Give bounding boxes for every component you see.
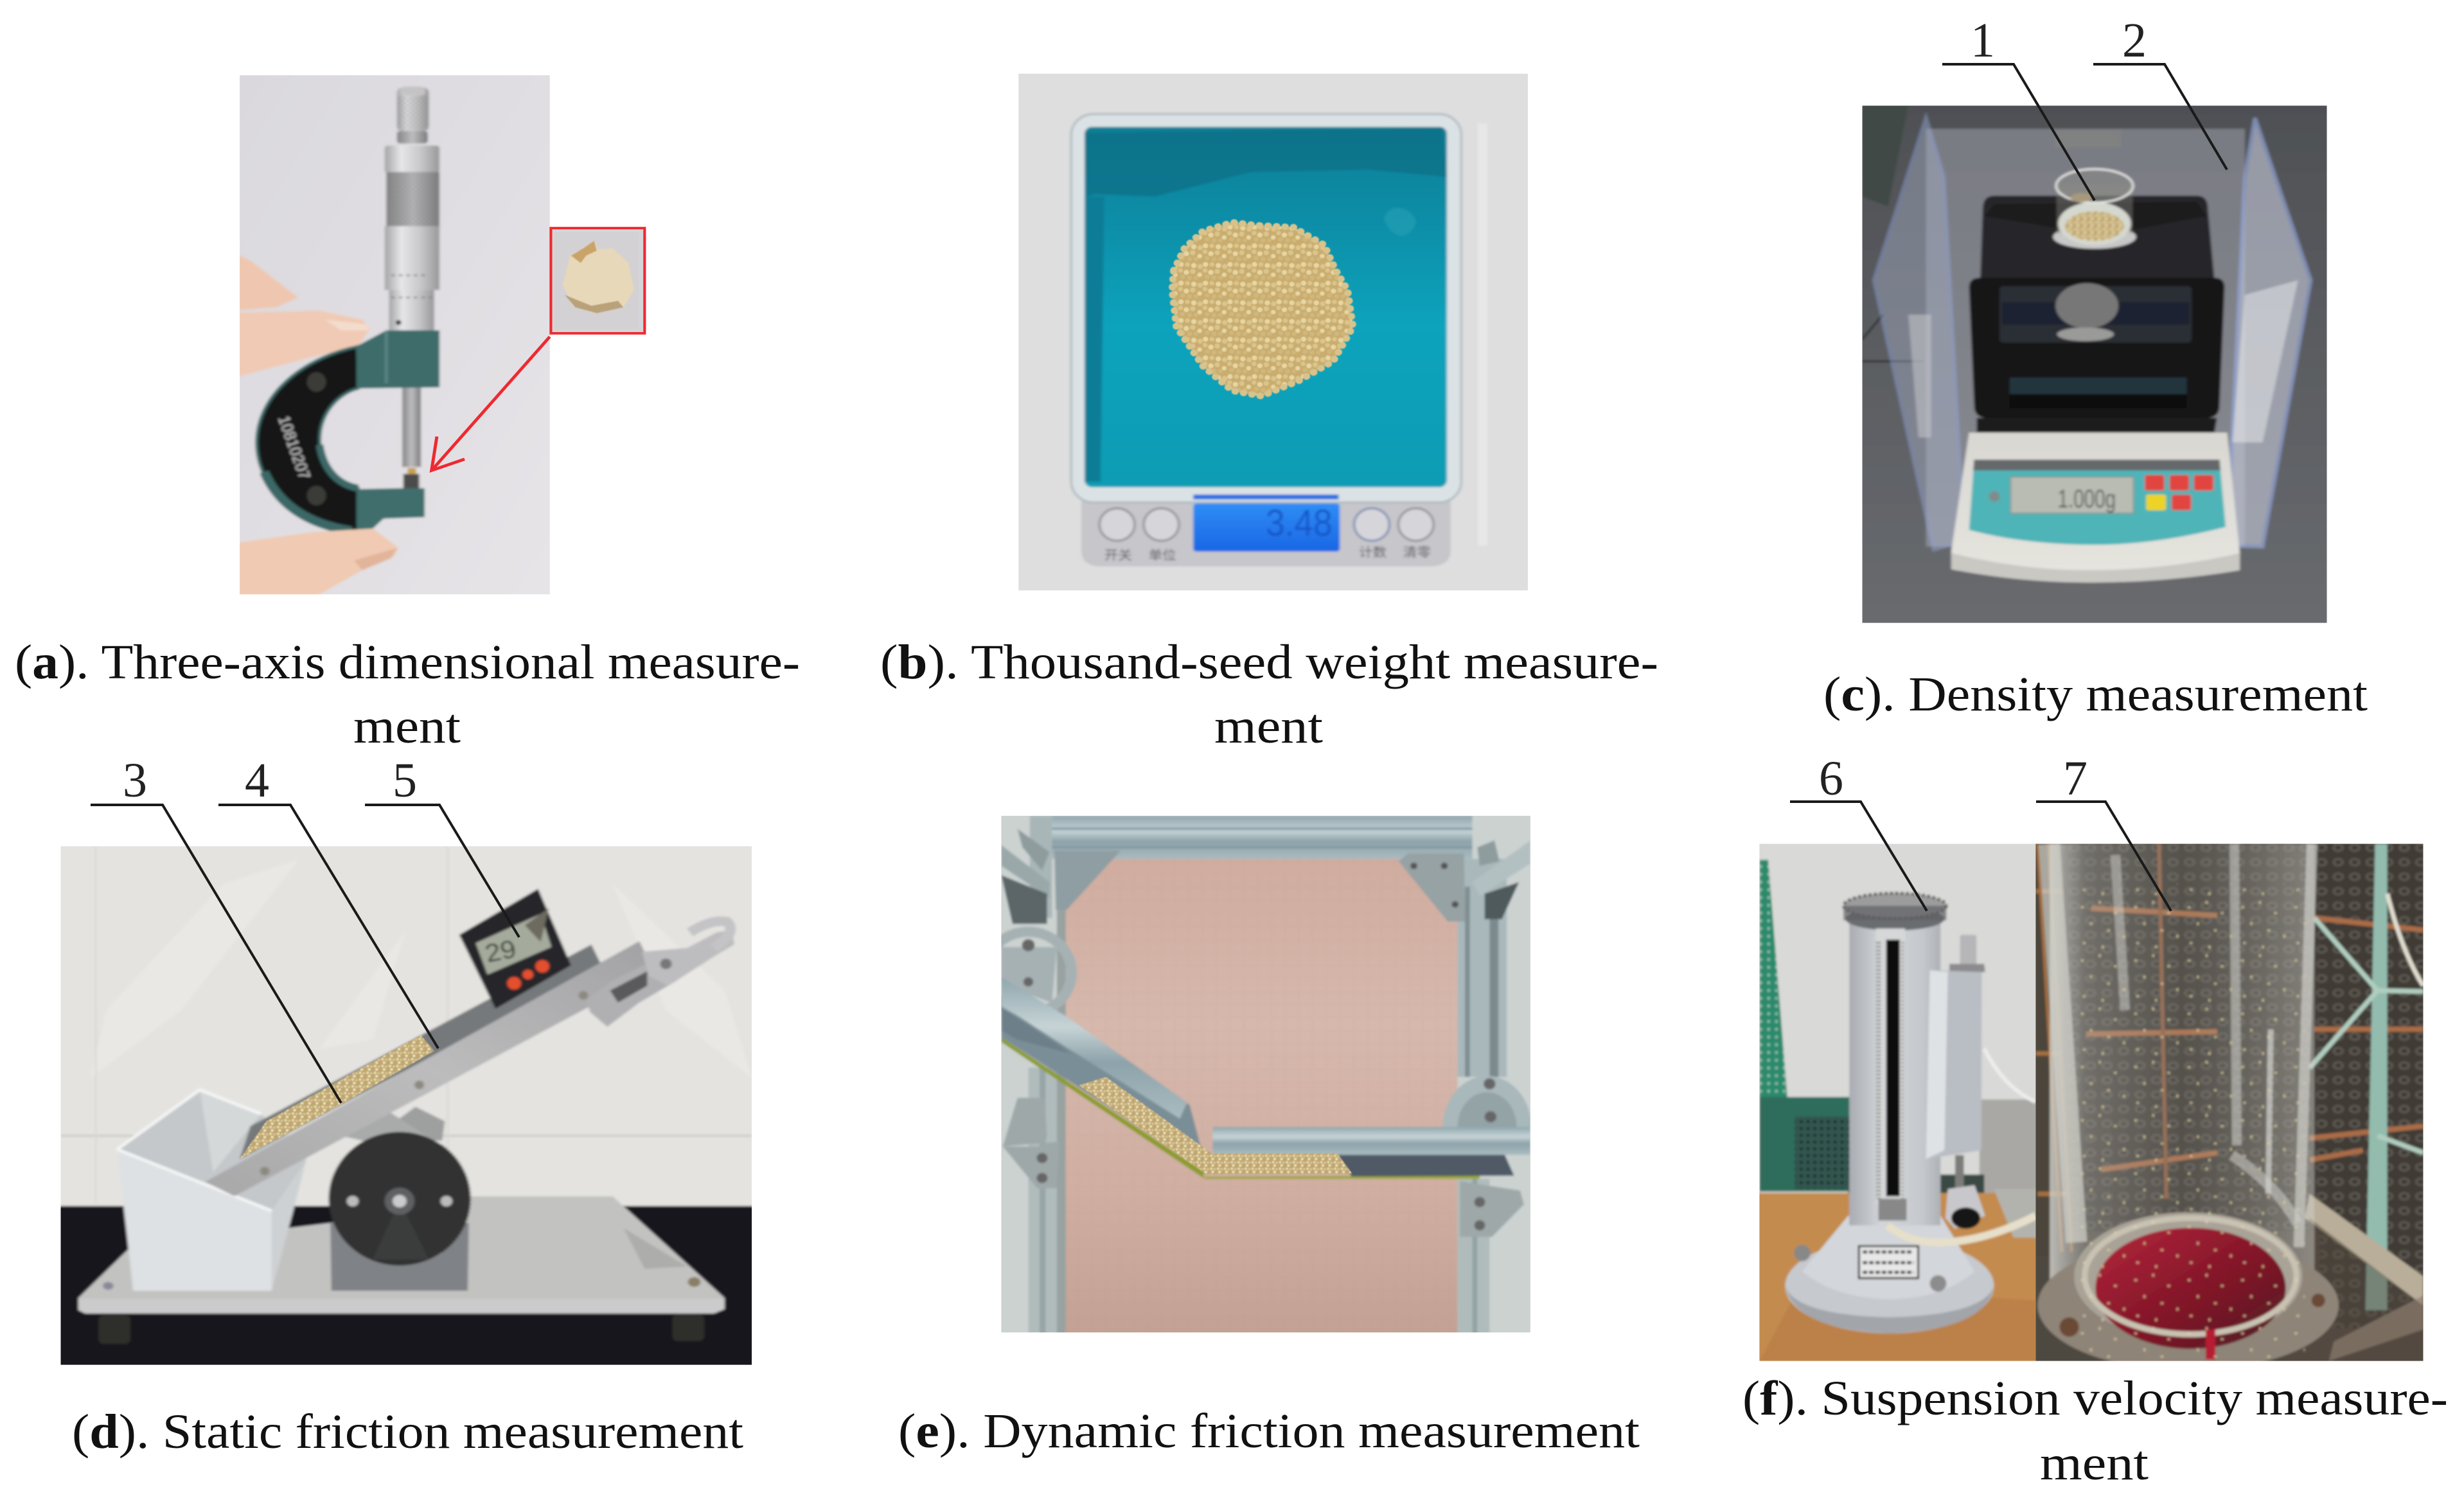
caption f (1742, 1371, 2448, 1490)
leader 2: 2 (2122, 13, 2147, 67)
caption e: (e). Dynamic friction measurement (898, 1404, 1640, 1458)
photo: inclined chute with angle meter (55, 842, 757, 1370)
photo: scale with seeds on blue tray: 开关 (1104, 549, 1132, 563)
leader 7 (2036, 752, 2171, 911)
photo: densimeter in acrylic case: 1.000g (2058, 484, 2116, 513)
leader 2 (2093, 13, 2227, 170)
caption c: (c). Density measurement (1823, 667, 2368, 721)
leader 6 (1790, 752, 1927, 911)
seeds on chute (240, 1035, 434, 1159)
caption d: (d). Static friction measurement (72, 1405, 743, 1459)
panel d: static friction measurement (55, 753, 757, 1459)
leader 4: 4 (245, 753, 269, 807)
panel b: thousand-seed weight measurement (1013, 69, 1533, 595)
caption a: ment (353, 700, 461, 753)
photo: scale with seeds on blue tray: 3.48 (1266, 502, 1333, 544)
arrow: red pointer to seed position (432, 337, 550, 470)
caption a (15, 635, 800, 753)
caption a: (a). Three-axis dimensional measure- (15, 635, 800, 689)
caption b (880, 635, 1658, 753)
photo: scale with seeds on blue tray (1013, 69, 1533, 595)
leader 5: 5 (393, 753, 417, 807)
seeds on bent chute (1079, 1077, 1352, 1174)
panel f: suspension velocity measurement (1742, 752, 2448, 1490)
leader 6: 6 (1819, 752, 1843, 806)
leader 1: 1 (1971, 13, 1995, 67)
leader 3: 3 (123, 753, 147, 807)
photo: bent chute on aluminium frame (985, 811, 1536, 1337)
photo: inclined chute with angle meter: 29 (483, 935, 519, 968)
photo: micrometer held in fingers: 10810207 (274, 414, 314, 481)
leader 7: 7 (2063, 752, 2087, 806)
leader 4 (218, 753, 438, 1048)
caption f: ment (2040, 1436, 2149, 1490)
leader 3 (91, 753, 341, 1103)
leader 5 (365, 753, 519, 937)
leader 1 (1942, 13, 2095, 200)
photo: micrometer held in fingers (235, 70, 644, 599)
photo: scale with seeds on blue tray: 单位 (1149, 549, 1176, 563)
photo: densimeter in acrylic case (1857, 101, 2332, 628)
panel c: density measurement (1823, 13, 2368, 721)
photo: scale with seeds on blue tray: 清零 (1403, 545, 1431, 560)
caption f: (f). Suspension velocity measure- (1742, 1371, 2448, 1425)
caption b: (b). Thousand-seed weight measure- (880, 635, 1658, 689)
panel e: dynamic friction measurement (898, 811, 1640, 1458)
photo: transparent tube with suspended seeds (2031, 839, 2428, 1371)
photo: scale with seeds on blue tray: 计数 (1359, 545, 1387, 560)
photo: manometer (1755, 839, 2041, 1366)
caption b: ment (1214, 700, 1323, 753)
inset: seed in red frame (551, 228, 644, 333)
panel a: three-axis dimensional measurement (15, 70, 800, 753)
seed pile (1172, 222, 1353, 396)
